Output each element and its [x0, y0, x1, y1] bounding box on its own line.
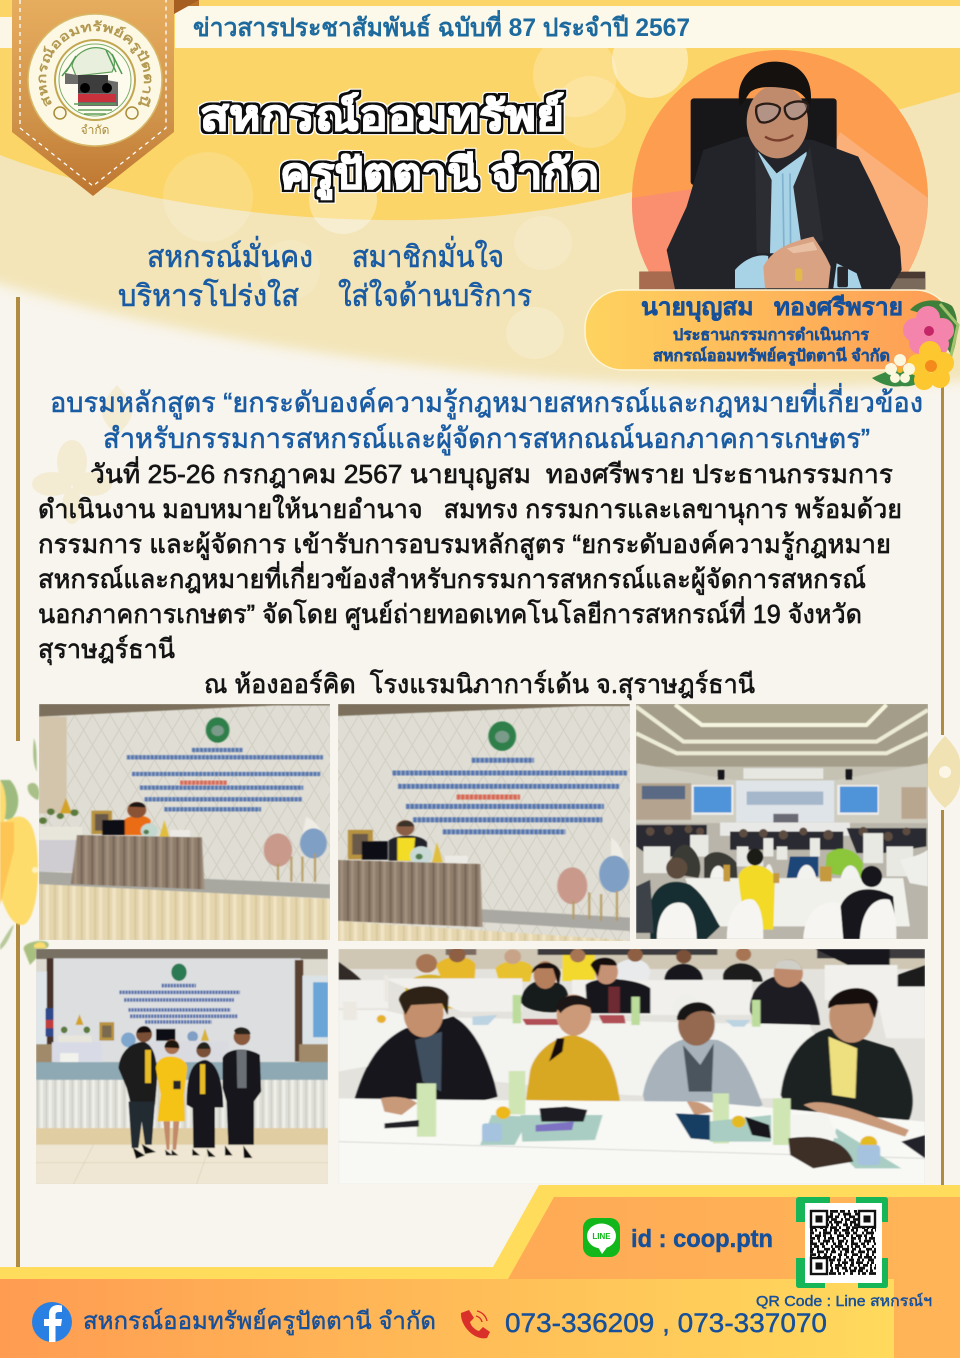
- photo 5: seated participants at table: [338, 949, 925, 1184]
- article heading: [50, 383, 923, 456]
- article body: ดำเนินงาน มอบหมายให้นายอำนาจ สมทรง กรรมการและเลขานุการ พร้อมด้วย: [38, 494, 902, 525]
- flower decoration: left: [0, 738, 49, 965]
- ornament: right: [923, 736, 960, 808]
- QR caption: QR Code : Line สหกรณ์ฯ: [756, 1293, 932, 1310]
- slogan: บริหารโปร่งใส: [118, 278, 299, 313]
- article body: สุราษฎร์ธานี: [38, 634, 175, 665]
- photo 3: conference hall: [636, 704, 928, 939]
- watermark ornaments: [32, 385, 132, 524]
- main title: [200, 92, 599, 200]
- slogan: สหกรณ์มั่นคง: [147, 236, 313, 274]
- article body: [38, 456, 902, 700]
- name plate text: ประธานกรรมการดำเนินการ: [673, 326, 869, 344]
- Facebook icon: [32, 1302, 72, 1342]
- logo seal: จำกัด: [81, 123, 109, 137]
- LINE icon: LINE: [592, 1232, 611, 1241]
- phone numbers: 073-336209 , 073-337070: [505, 1308, 827, 1338]
- QR code: [796, 1197, 888, 1288]
- article body: ณ ห้องออร์คิด โรงแรมนิภาการ์เด้น จ.สุราษฎร์ธานี: [204, 669, 755, 700]
- name plate text: [641, 294, 903, 367]
- slogan: [118, 236, 532, 313]
- ribbon with logo: [12, 0, 199, 196]
- Facebook page name: สหกรณ์ออมทรัพย์ครูปัตตานี จำกัด: [83, 1307, 436, 1336]
- flowers on name plate: [872, 300, 958, 390]
- bottom yellow band and panels: [0, 1185, 960, 1358]
- gold side lines: [16, 297, 944, 1267]
- article body: สหกรณ์และกฎหมายที่เกี่ยวข้องสำหรับกรรมการสหกรณ์และผู้จัดการสหกรณ์: [38, 561, 866, 595]
- logo seal: สหกรณ์ออมทรัพย์ครูปัตตานี: [38, 20, 152, 108]
- photo 2: speaker in yellow at table: [338, 704, 630, 941]
- article heading: สำหรับกรรมการสหกรณ์และผู้จัดการสหกณณ์นอกภาคการเกษตร”: [103, 423, 870, 456]
- article body: นอกภาคการเกษตร” จัดโดย ศูนย์ถ่ายทอดเทคโนโลยีการสหกรณ์ที่ 19 จังหวัด: [38, 596, 862, 630]
- name plate: [585, 290, 953, 370]
- name plate text: สหกรณ์ออมทรัพย์ครูปัตตานี จำกัด: [653, 346, 890, 367]
- name plate text: นายบุญสม ทองศรีพราย: [641, 294, 903, 323]
- article body: วันที่ 25-26 กรกฎาคม 2567 นายบุญสม ทองศรีพราย ประธานกรรมการ: [90, 456, 893, 490]
- LINE icon: [583, 1218, 620, 1257]
- logo seal: [27, 14, 163, 147]
- photo 4: group of four in front of stage: [36, 949, 328, 1184]
- header background bands: [0, 0, 960, 400]
- article body: กรรมการ และผู้จัดการ เข้ารับการอบรมหลักสูตร “ยกระดับองค์ความรู้กฎหมาย: [38, 529, 891, 560]
- main title: ครูปัตตานี จำกัด: [280, 150, 599, 200]
- top header strip: [0, 6, 960, 48]
- main title: สหกรณ์ออมทรัพย์: [200, 92, 564, 139]
- article heading: อบรมหลักสูตร “ยกระดับองค์ความรู้กฎหมายสหกรณ์และกฎหมายที่เกี่ยวข้อง: [50, 383, 923, 420]
- header strip text: ข่าวสารประชาสัมพันธ์ ฉบับที่ 87 ประจำปี 2567: [193, 10, 690, 42]
- slogan: สมาชิกมั่นใจ: [352, 236, 504, 274]
- phone icon: [461, 1310, 490, 1338]
- portrait circle and chairman photo: [632, 50, 928, 346]
- photo 1: speaker in orange at table: [39, 704, 330, 940]
- LINE id text: id : coop.ptn: [631, 1225, 773, 1253]
- slogan: ใส่ใจด้านบริการ: [338, 279, 532, 313]
